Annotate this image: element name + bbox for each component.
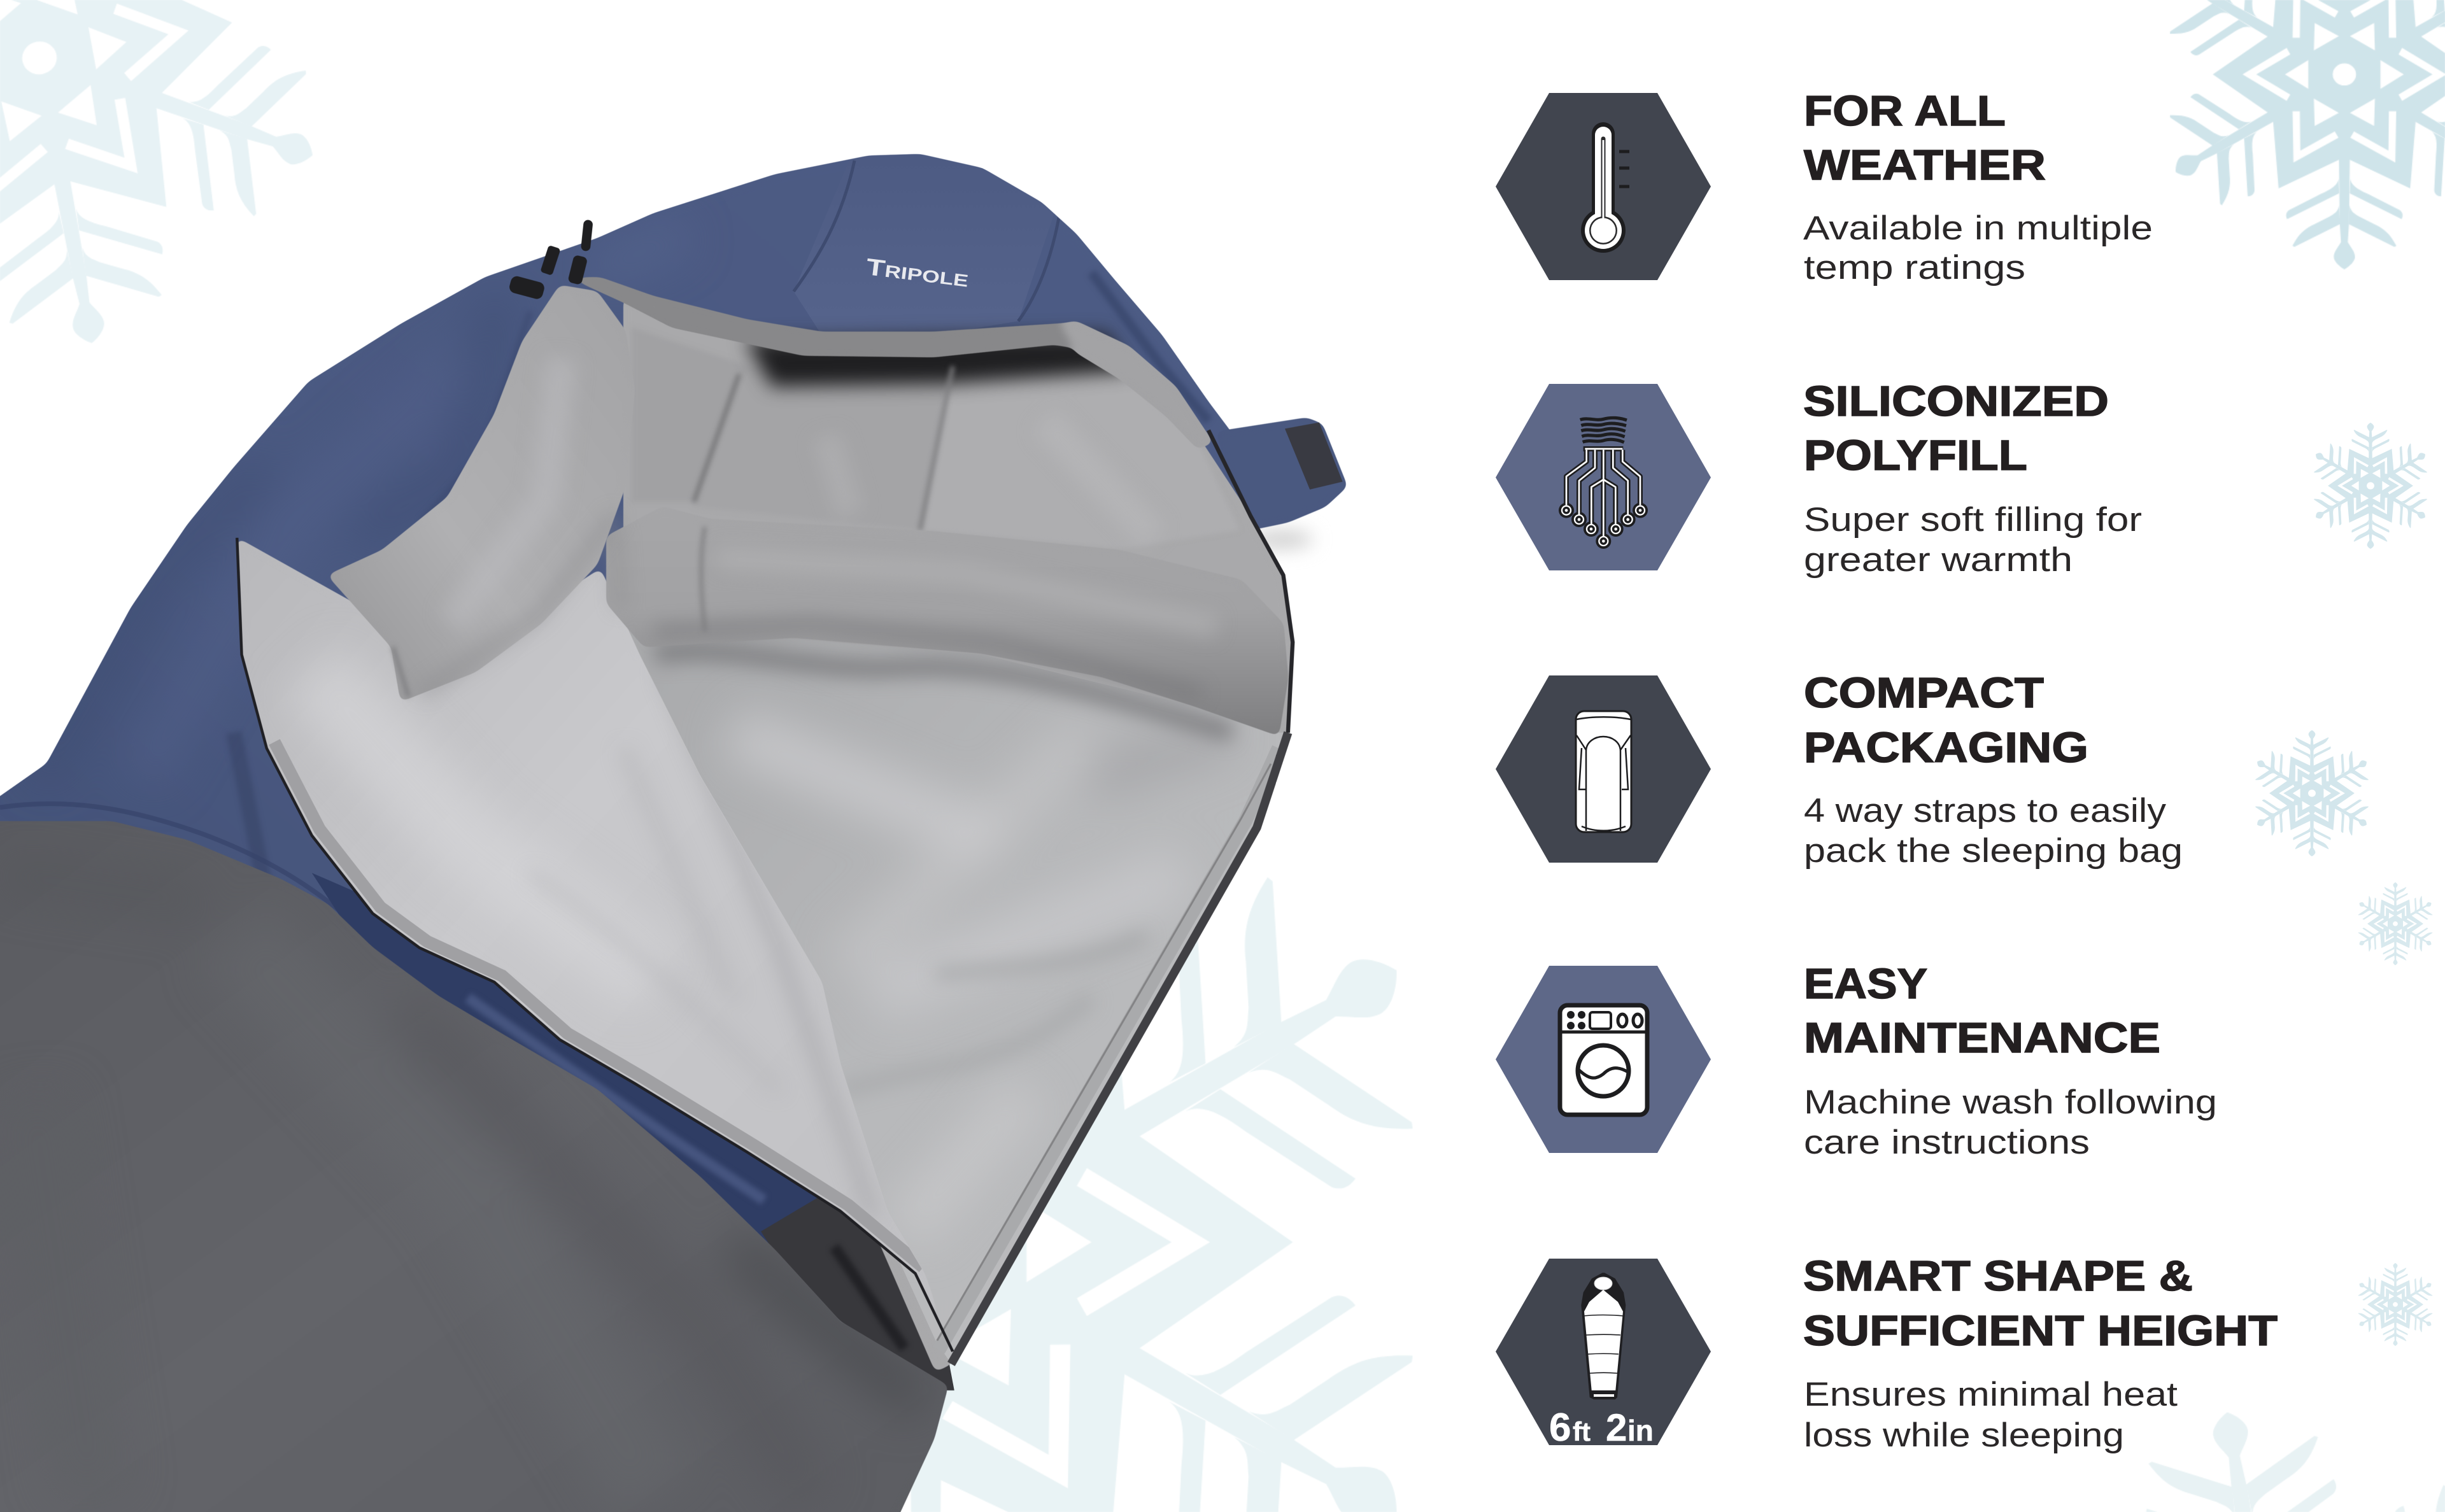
heading: POLYFILL [1804, 432, 2027, 479]
heading: WEATHER [1804, 141, 2046, 189]
description: care instructions [1804, 1124, 2090, 1161]
description [1804, 501, 2142, 579]
velcro tab [1216, 418, 1347, 530]
drawcord toggles [508, 220, 593, 300]
heading: PACKAGING [1804, 724, 2088, 772]
blue outer shell [0, 154, 1293, 1364]
icon: circuit fibres on blue hexagon [1496, 384, 1711, 570]
collar shading [421, 358, 616, 694]
heading [1804, 960, 2160, 1062]
shell shading [0, 140, 1208, 935]
feature row: for all weather [1496, 87, 2153, 286]
description [1804, 1376, 2178, 1454]
height label: in [1627, 1414, 1654, 1447]
flap folds [274, 670, 923, 1268]
description: Ensures minimal heat [1804, 1376, 2178, 1413]
icon: washing machine on blue hexagon [1496, 966, 1711, 1153]
folded lining flap [237, 538, 953, 1352]
left zipper [237, 538, 953, 1352]
icon: packed sleeping bag on dark hexagon [1496, 675, 1711, 863]
height label: 2 [1606, 1406, 1627, 1449]
description: 4 way straps to easily [1804, 792, 2167, 830]
interior panels [632, 327, 1240, 549]
heading [1803, 1252, 2278, 1355]
pocket fold [834, 1247, 904, 1348]
snowflake: top right [2152, 0, 2445, 280]
snowflake: right lower tiny [2353, 1263, 2437, 1346]
heading: EASY [1804, 960, 1927, 1008]
description: temp ratings [1804, 249, 2025, 286]
description [1803, 209, 2153, 286]
feature row: smart shape and sufficient height [1496, 1252, 2278, 1454]
tube crease [701, 527, 705, 632]
snowflake: right tiny [2353, 882, 2437, 965]
heading: SILICONIZED [1803, 378, 2109, 425]
heading: COMPACT [1804, 669, 2044, 717]
brand logo: TRIPOLE [865, 253, 970, 292]
heading: SUFFICIENT HEIGHT [1803, 1307, 2278, 1355]
right zipper [951, 430, 1293, 1364]
tube shading [616, 530, 1216, 694]
horizontal rolled draft tube [607, 507, 1288, 736]
collar crease [393, 647, 409, 696]
description [1804, 792, 2183, 870]
description: Available in multiple [1803, 209, 2153, 247]
description: Super soft filling for [1804, 501, 2142, 539]
feature row: siliconized polyfill [1496, 378, 2142, 579]
snowflake: right upper small [2306, 423, 2435, 549]
lower lining [608, 623, 1288, 1364]
heading [1804, 87, 2046, 189]
icon: mummy bag with height on dark hexagon [1496, 1259, 1711, 1450]
grey lower shell [0, 821, 948, 1512]
description: loss while sleeping [1804, 1417, 2124, 1454]
heading [1803, 378, 2109, 479]
description: Machine wash following [1804, 1084, 2217, 1121]
left collar tube [327, 285, 635, 702]
snowflake: right middle [2248, 730, 2376, 856]
description: greater warmth [1804, 541, 2073, 579]
navy under-flap band [312, 873, 842, 1266]
snowflake: bottom right [2063, 1401, 2445, 1512]
feature row: compact packaging [1496, 669, 2183, 870]
tab shadow [1251, 530, 1313, 549]
heading [1804, 669, 2088, 772]
description: pack the sleeping bag [1804, 832, 2183, 870]
heading: MAINTENANCE [1804, 1014, 2160, 1062]
lining folds [655, 652, 1232, 1231]
product photo: sleeping bag [0, 154, 1346, 1512]
navy band highlight [468, 998, 764, 1200]
snowflake: top left [0, 0, 357, 357]
heading: FOR ALL [1804, 87, 2006, 135]
dark inner pocket [761, 1192, 954, 1390]
hood centre panel [795, 154, 1044, 331]
heading: SMART SHAPE & [1803, 1252, 2193, 1300]
height label: 6 [1549, 1406, 1571, 1450]
interior hood and lining base [624, 296, 1293, 1372]
grey shell shading [732, 1244, 916, 1402]
right zipper seam band [937, 748, 1279, 1350]
description [1804, 1084, 2217, 1161]
snowflake: large behind bag [828, 828, 1419, 1512]
height label: ft [1573, 1417, 1591, 1446]
feature row: easy maintenance [1496, 960, 2217, 1161]
hood rim lining [569, 278, 1213, 449]
icon: thermometer on dark hexagon [1496, 93, 1711, 280]
